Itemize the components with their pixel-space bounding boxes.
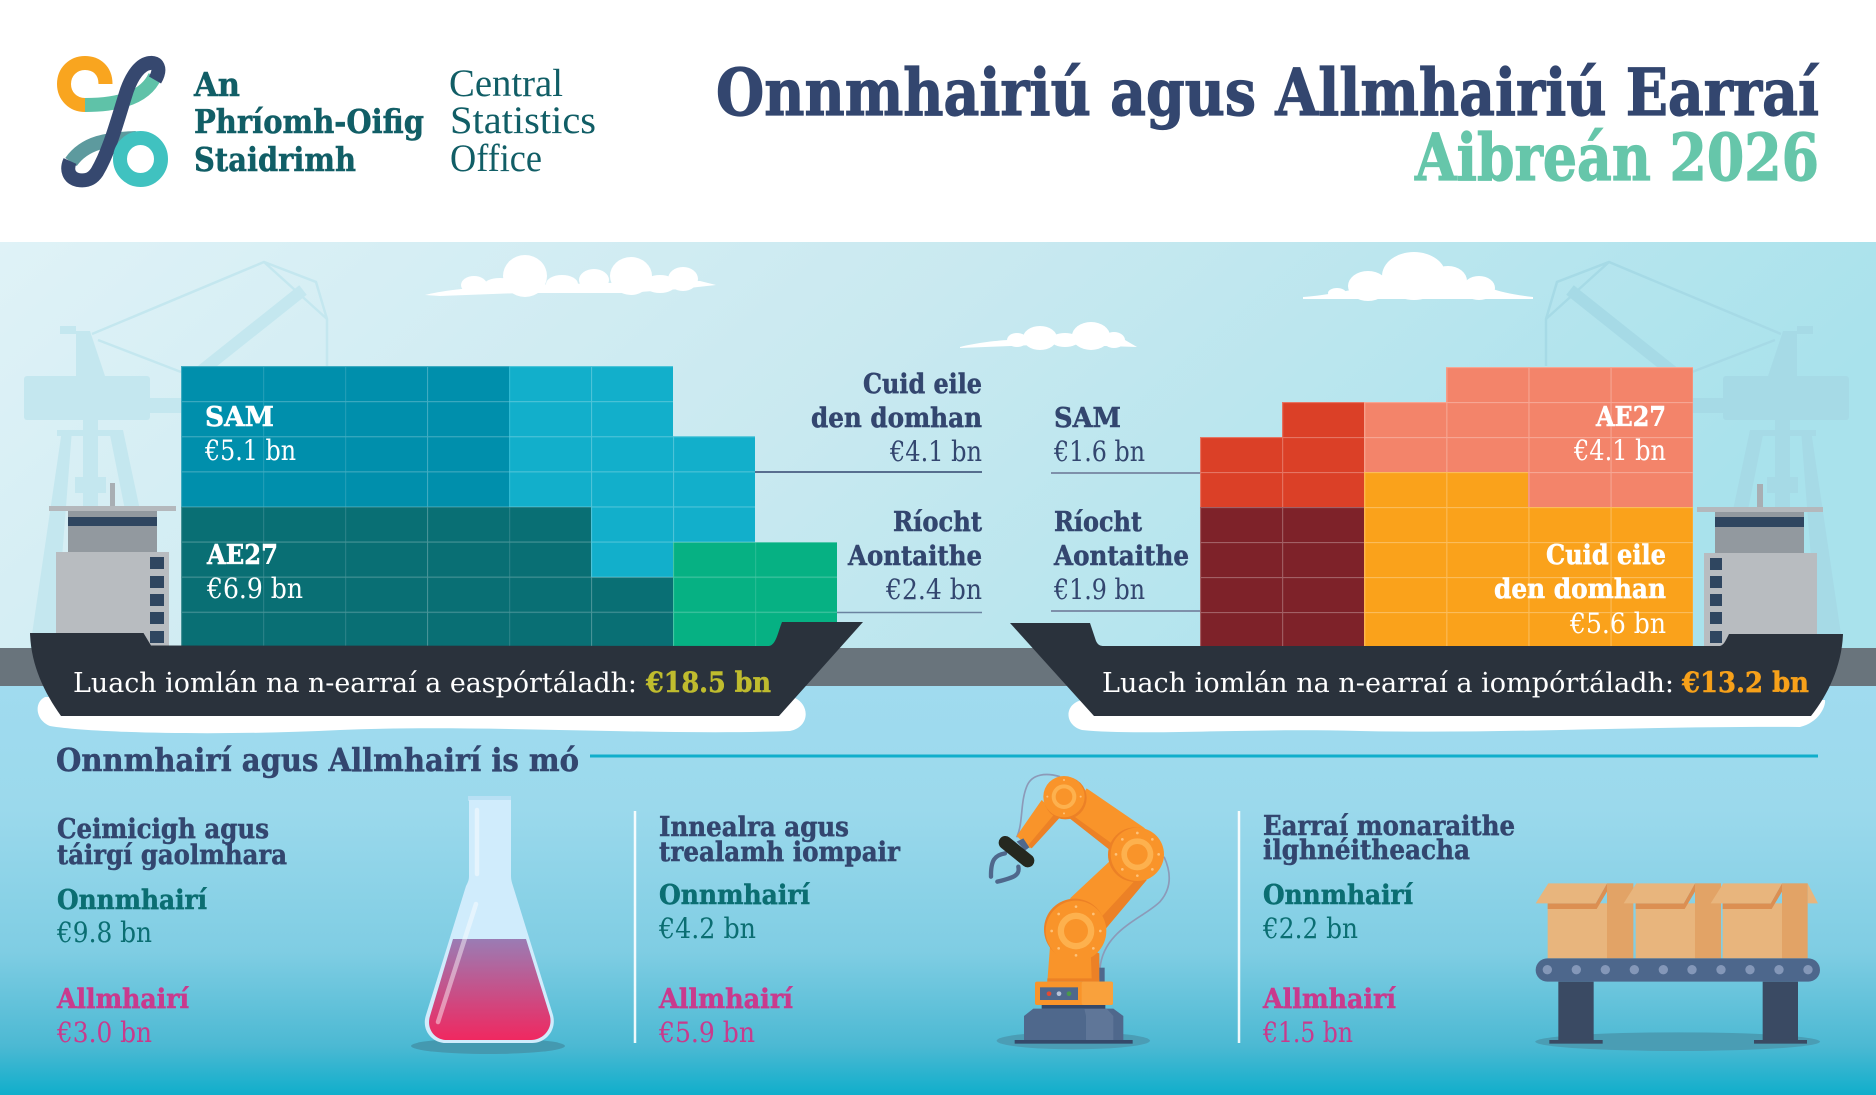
logo text English bbox=[449, 62, 596, 180]
chemicals exports bbox=[56, 885, 208, 949]
hull bbox=[1010, 623, 1843, 716]
panel: machinery bbox=[635, 775, 1169, 1049]
label rest of world imports: Cuid eile bbox=[1546, 540, 1666, 571]
logo bbox=[64, 62, 596, 180]
container stack bbox=[181, 366, 837, 647]
cloud middle bbox=[960, 322, 1137, 350]
label UK imports bbox=[1051, 507, 1200, 611]
label UK exports: Aontaithe bbox=[847, 541, 982, 572]
label UK exports bbox=[837, 507, 982, 612]
logo text English: Office bbox=[450, 137, 542, 180]
chemicals imports: €3.0 bn bbox=[56, 1016, 152, 1049]
quay bbox=[0, 648, 1876, 686]
logo text English: Central bbox=[449, 62, 563, 105]
label SAM: €5.1 bn bbox=[204, 434, 296, 467]
total imports: €13.2 bn bbox=[1681, 666, 1809, 699]
label AE27 imports: AE27 bbox=[1595, 402, 1666, 433]
machinery heading bbox=[659, 812, 901, 868]
header background bbox=[0, 0, 1876, 242]
machinery heading: trealamh iompair bbox=[659, 837, 901, 868]
chemicals exports: Onnmhairí bbox=[57, 885, 208, 916]
manufactured goods imports: Allmhairí bbox=[1262, 984, 1397, 1015]
section heading: Onnmhairí agus Allmhairí is mó bbox=[56, 741, 579, 779]
logo text Irish: An bbox=[193, 65, 240, 104]
crane right bbox=[1546, 262, 1849, 648]
manufactured goods imports bbox=[1262, 984, 1397, 1049]
logo text Irish bbox=[193, 65, 424, 179]
chemicals heading: Ceimicigh agus bbox=[57, 814, 269, 845]
icon: robot arm bbox=[991, 775, 1169, 1049]
logo text English: Statistics bbox=[450, 99, 596, 142]
label SAM: SAM bbox=[205, 402, 274, 433]
panel: manufactured goods bbox=[1239, 811, 1820, 1051]
label SAM imports: SAM bbox=[1054, 403, 1121, 434]
label AE27: AE27 bbox=[206, 540, 278, 571]
icon: flask bbox=[411, 796, 565, 1054]
manufactured goods exports bbox=[1262, 880, 1414, 945]
chemicals imports bbox=[56, 984, 190, 1049]
chemicals heading: táirgí gaolmhara bbox=[57, 840, 287, 871]
manufactured goods heading: Earraí monaraithe bbox=[1263, 811, 1515, 842]
manufactured goods heading: ilghnéitheacha bbox=[1263, 835, 1470, 866]
chemicals exports: €9.8 bn bbox=[56, 916, 152, 949]
label rest of world exports: Cuid eile bbox=[863, 369, 982, 400]
ship wake foam bbox=[38, 697, 806, 733]
machinery exports bbox=[658, 880, 811, 945]
machinery imports: Allmhairí bbox=[658, 984, 794, 1015]
label rest of world imports: den domhan bbox=[1494, 574, 1666, 605]
label AE27 imports bbox=[1573, 402, 1666, 467]
label AE27 bbox=[206, 540, 303, 605]
label SAM bbox=[204, 402, 296, 467]
label SAM imports bbox=[1051, 403, 1200, 473]
machinery heading: Innealra agus bbox=[659, 812, 849, 843]
ship superstructure bbox=[49, 483, 176, 646]
panel: imports ship bbox=[1010, 367, 1843, 732]
label SAM imports: €1.6 bn bbox=[1053, 435, 1145, 468]
container stack bbox=[1200, 367, 1693, 647]
manufactured goods exports: Onnmhairí bbox=[1263, 880, 1414, 911]
label AE27 imports: €4.1 bn bbox=[1573, 434, 1666, 467]
label UK imports: €1.9 bn bbox=[1053, 573, 1145, 606]
total exports: €18.5 bn bbox=[645, 666, 771, 699]
chemicals imports: Allmhairí bbox=[56, 984, 190, 1015]
ship superstructure bbox=[1697, 484, 1823, 647]
label rest of world imports: €5.6 bn bbox=[1569, 607, 1666, 640]
panel: exports ship bbox=[30, 366, 982, 733]
label UK exports: Ríocht bbox=[893, 507, 982, 538]
water bbox=[0, 686, 1876, 1095]
logo text Irish: Staidrimh bbox=[194, 140, 356, 179]
crane left bbox=[24, 262, 327, 648]
manufactured goods heading bbox=[1263, 811, 1515, 866]
logo mark bbox=[64, 63, 161, 180]
chemicals heading bbox=[57, 814, 287, 871]
ship wake foam bbox=[1068, 700, 1825, 732]
hull bbox=[30, 622, 863, 716]
total imports: Luach iomlán na n-earraí a iompórtáladh: bbox=[1102, 668, 1674, 699]
machinery imports: €5.9 bn bbox=[658, 1016, 755, 1049]
label rest of world imports bbox=[1494, 540, 1666, 640]
sky bbox=[0, 242, 1876, 652]
cloud left bbox=[425, 255, 716, 297]
panel: chemicals bbox=[56, 796, 565, 1054]
manufactured goods exports: €2.2 bn bbox=[1262, 912, 1358, 945]
label rest of world exports bbox=[755, 369, 982, 472]
label UK imports: Ríocht bbox=[1054, 507, 1142, 538]
total exports: Luach iomlán na n-earraí a easpórtáladh: bbox=[73, 668, 637, 699]
machinery exports: €4.2 bn bbox=[658, 912, 756, 945]
label rest of world exports: €4.1 bn bbox=[889, 435, 982, 468]
label rest of world exports: den domhan bbox=[811, 403, 982, 434]
machinery imports bbox=[658, 984, 794, 1049]
icon: conveyor with boxes bbox=[1535, 883, 1820, 1051]
label AE27: €6.9 bn bbox=[206, 572, 303, 605]
manufactured goods imports: €1.5 bn bbox=[1262, 1016, 1353, 1049]
label UK imports: Aontaithe bbox=[1053, 541, 1189, 572]
logo text Irish: Phríomh-Oifig bbox=[194, 102, 424, 141]
machinery exports: Onnmhairí bbox=[659, 880, 811, 911]
label UK exports: €2.4 bn bbox=[885, 573, 982, 606]
cloud right bbox=[1303, 252, 1533, 301]
